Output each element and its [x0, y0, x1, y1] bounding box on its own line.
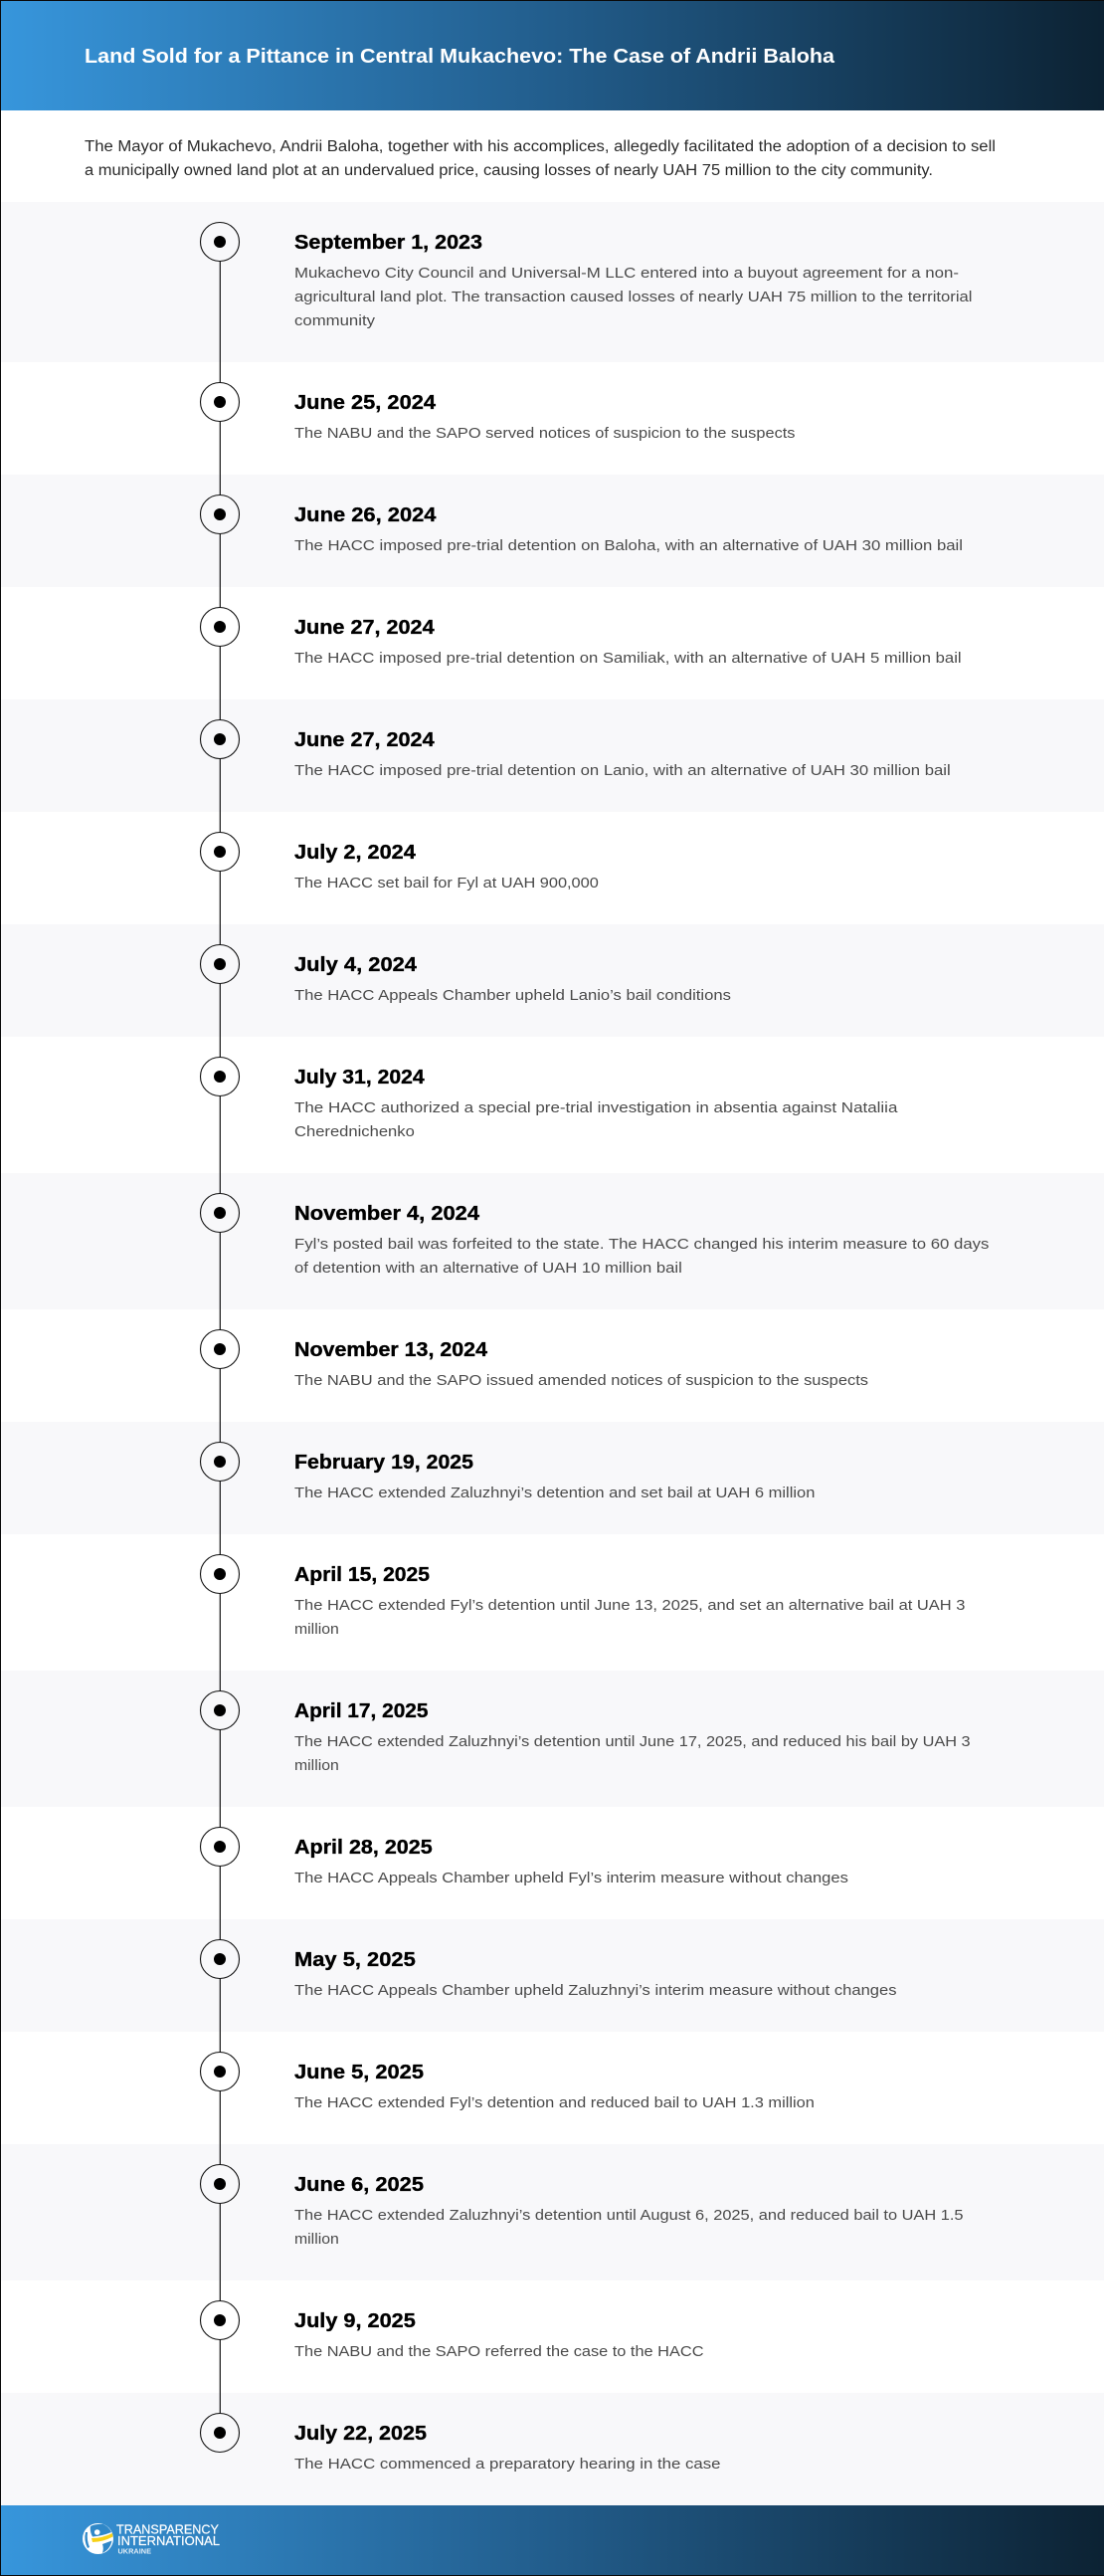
description: The HACC imposed pre-trial detention on Lanio, with an alternative of UAH 30 million bail: [294, 762, 951, 779]
description: The NABU and the SAPO issued amended notices of suspicion to the suspects: [294, 1372, 868, 1389]
date: April 17, 2025: [294, 1700, 428, 1722]
description: The HACC set bail for Fyl at UAH 900,000: [294, 875, 599, 892]
marker: [201, 382, 239, 422]
marker: [201, 2300, 239, 2340]
date: June 27, 2024: [294, 617, 436, 639]
description: agricultural land plot. The transaction caused losses of nearly UAH 75 million to the territorial: [294, 289, 973, 305]
description: The NABU and the SAPO referred the case to the HACC: [294, 2343, 704, 2360]
event: May 5, 2025: [201, 1940, 897, 1999]
marker: [201, 832, 239, 872]
event: September 1, 2023: [201, 223, 973, 329]
date: July 2, 2024: [294, 842, 417, 864]
description: million: [294, 1621, 339, 1638]
intro paragraph: [85, 138, 996, 179]
description: The HACC Appeals Chamber upheld Lanio’s bail conditions: [294, 987, 731, 1004]
description: The HACC Appeals Chamber upheld Fyl’s interim measure without changes: [294, 1870, 848, 1886]
event: June 6, 2025: [201, 2165, 963, 2248]
description: Fyl’s posted bail was forfeited to the state. The HACC changed his interim measure to 60 days: [294, 1236, 989, 1253]
event: July 9, 2025: [201, 2300, 704, 2360]
description: The HACC extended Zaluzhnyi’s detention until August 6, 2025, and reduced bail to UAH 1.5: [294, 2207, 963, 2224]
logo: Transparency International Ukraine: [83, 2521, 220, 2555]
marker: [201, 1329, 239, 1369]
wordmark: INTERNATIONAL: [117, 2533, 220, 2548]
date: July 9, 2025: [294, 2310, 416, 2332]
description: The HACC extended Zaluzhnyi’s detention and set bail at UAH 6 million: [294, 1485, 815, 1501]
description: [294, 1099, 898, 1140]
event: November 4, 2024: [201, 1194, 989, 1277]
marker: [201, 607, 239, 647]
description: The HACC imposed pre-trial detention on Samiliak, with an alternative of UAH 5 million bail: [294, 650, 962, 667]
marker: [201, 495, 239, 533]
description: The HACC extended Zaluzhnyi’s detention until June 17, 2025, and reduced his bail by UAH 3: [294, 1733, 971, 1750]
event: June 5, 2025: [201, 2052, 815, 2111]
title: Land Sold for a Pittance in Central Mukachevo: The Case of Andrii Baloha: [85, 46, 835, 68]
event: July 31, 2024: [201, 1057, 898, 1140]
date: July 22, 2025: [294, 2423, 427, 2445]
description: million: [294, 2231, 339, 2248]
wordmark: UKRAINE: [117, 2549, 151, 2555]
description: [294, 1597, 965, 1638]
date: July 31, 2024: [294, 1067, 426, 1089]
marker: [201, 1827, 239, 1867]
description: [294, 1733, 971, 1774]
date: July 4, 2024: [294, 954, 418, 976]
header banner: [0, 0, 1104, 110]
date: February 19, 2025: [294, 1452, 473, 1474]
description: The HACC imposed pre-trial detention on Baloha, with an alternative of UAH 30 million bail: [294, 537, 963, 554]
marker: [201, 945, 239, 983]
event: April 28, 2025: [201, 1827, 848, 1886]
date: June 5, 2025: [294, 2062, 424, 2083]
timeline vertical line: [220, 242, 221, 2433]
intro paragraph: a municipally owned land plot at an undervalued price, causing losses of nearly UAH 75 million to the city community.: [85, 162, 933, 179]
marker: [201, 2165, 239, 2203]
description: The HACC authorized a special pre-trial investigation in absentia against Nataliia: [294, 1099, 898, 1116]
date: June 26, 2024: [294, 504, 437, 526]
marker: [201, 1194, 239, 1232]
date: June 25, 2024: [294, 392, 437, 414]
date: November 13, 2024: [294, 1339, 488, 1361]
event: July 22, 2025: [201, 2414, 720, 2473]
marker: [201, 1940, 239, 1978]
description: of detention with an alternative of UAH 10 million bail: [294, 1260, 682, 1277]
event: July 4, 2024: [201, 945, 731, 1004]
marker: [201, 1057, 239, 1096]
marker: [201, 2052, 239, 2091]
description: The HACC extended Fyl’s detention and reduced bail to UAH 1.3 million: [294, 2094, 815, 2111]
event: June 26, 2024: [201, 495, 963, 554]
marker: [201, 720, 239, 758]
date: June 6, 2025: [294, 2174, 424, 2196]
wordmark: TRANSPARENCY: [116, 2521, 219, 2537]
description: Cherednichenko: [294, 1123, 415, 1140]
date: September 1, 2023: [294, 232, 482, 254]
event: November 13, 2024: [201, 1329, 868, 1389]
description: The HACC Appeals Chamber upheld Zaluzhnyi’s interim measure without changes: [294, 1982, 897, 1999]
description: community: [294, 312, 376, 329]
marker: [201, 1554, 239, 1594]
date: May 5, 2025: [294, 1949, 416, 1971]
marker: [201, 2414, 239, 2452]
date: November 4, 2024: [294, 1203, 480, 1225]
description: The NABU and the SAPO served notices of suspicion to the suspects: [294, 425, 796, 442]
event: April 15, 2025: [201, 1554, 965, 1638]
description: [294, 1236, 989, 1277]
footer banner: [0, 2505, 1104, 2576]
event: April 17, 2025: [201, 1691, 971, 1774]
description: The HACC extended Fyl’s detention until June 13, 2025, and set an alternative bail at UAH 3: [294, 1597, 965, 1614]
event: February 19, 2025: [201, 1443, 815, 1501]
icon: globe with figure: [83, 2523, 113, 2554]
description: [294, 265, 973, 329]
date: June 27, 2024: [294, 729, 436, 751]
date: April 15, 2025: [294, 1564, 430, 1586]
date: April 28, 2025: [294, 1837, 433, 1859]
description: [294, 2207, 963, 2248]
marker: [201, 223, 239, 261]
event: June 25, 2024: [201, 382, 796, 442]
marker: [201, 1443, 239, 1481]
intro paragraph: The Mayor of Mukachevo, Andrii Baloha, together with his accomplices, allegedly facilitated the adoption of a decision to sell: [85, 138, 996, 155]
event: July 2, 2024: [201, 832, 599, 892]
event: June 27, 2024 (Samiliak): [201, 607, 962, 667]
description: million: [294, 1757, 339, 1774]
event: June 27, 2024 (Lanio): [201, 720, 951, 779]
marker: [201, 1691, 239, 1729]
description: The HACC commenced a preparatory hearing in the case: [294, 2456, 720, 2473]
description: Mukachevo City Council and Universal-M LLC entered into a buyout agreement for a non-: [294, 265, 959, 282]
wordmark: [116, 2521, 220, 2555]
